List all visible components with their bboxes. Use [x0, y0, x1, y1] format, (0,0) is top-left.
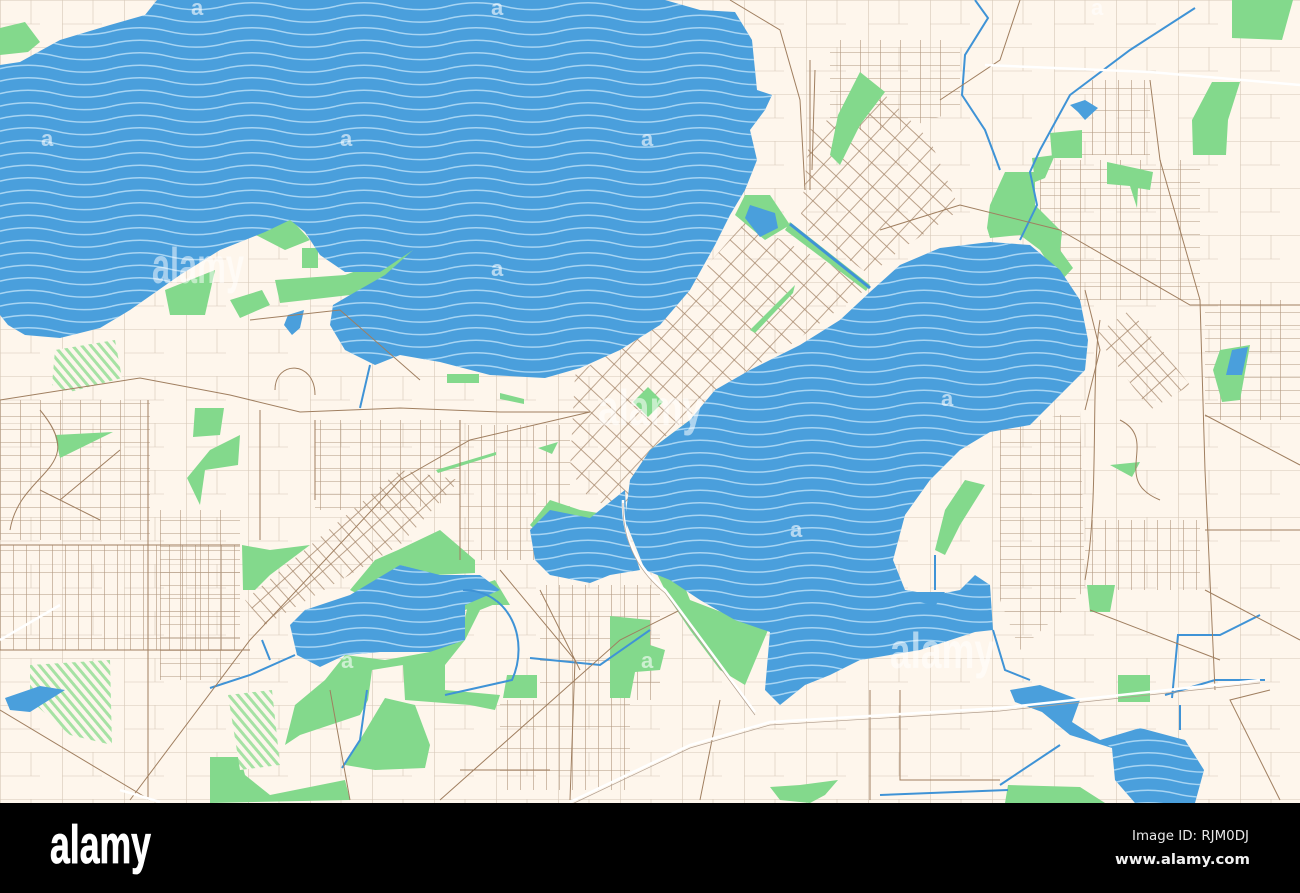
- park: isthmus north: [735, 195, 790, 240]
- park: north peninsula middle: [230, 290, 270, 318]
- footer logo: alamy: alamy: [50, 815, 151, 875]
- park: west irregular: [187, 435, 240, 505]
- park: shoreline strip: [632, 420, 695, 482]
- park: south shore: [655, 570, 768, 685]
- watermark: repeated letter marks: [41, 0, 1104, 673]
- park: east pond: [1213, 345, 1250, 402]
- watermark: repeated letter marks: a: [341, 648, 354, 673]
- lake: central: [625, 242, 1088, 705]
- park: arboretum: [285, 590, 505, 745]
- lake: bay: [530, 490, 640, 583]
- park: top right: [1232, 0, 1293, 40]
- streams and canals: [210, 0, 1265, 795]
- watermark: repeated letter marks: a: [340, 126, 353, 151]
- park: marsh north: [1032, 155, 1055, 182]
- park: south block: [610, 616, 665, 698]
- park: bay shore: [530, 500, 610, 530]
- watermark: repeated letter marks: a: [790, 517, 803, 542]
- watermark: repeated letter marks: a: [641, 126, 654, 151]
- park: north peninsula west: [165, 270, 215, 315]
- park: small patches: [436, 285, 1140, 477]
- watermark: downtown: alamy: [598, 380, 703, 436]
- park: small square: [1050, 130, 1082, 158]
- park: lake head marsh: [987, 172, 1073, 282]
- watermark: repeated letter marks: a: [41, 126, 54, 151]
- highway casing: [570, 503, 1260, 805]
- watermark: repeated letter marks: a: [491, 256, 504, 281]
- park: south east peninsula: [935, 480, 985, 555]
- golf courses: [30, 340, 280, 770]
- park: upper lake shore: [350, 530, 475, 595]
- park: square south: [1118, 675, 1150, 702]
- park: lake east shore: [465, 580, 510, 610]
- park: west square: [193, 408, 224, 437]
- park: bottom right: [1005, 785, 1105, 803]
- watermark: north peninsula: alamy: [152, 238, 244, 294]
- watermark: [41, 0, 1104, 679]
- park: north peninsula spit: [275, 250, 413, 303]
- footer website: www.alamy.com: [1115, 852, 1250, 868]
- watermark: south shore: alamy: [890, 623, 995, 679]
- park: bottom middle: [770, 780, 838, 803]
- park: rail corridor: [830, 72, 885, 165]
- park: east angular: [1107, 162, 1153, 208]
- park: bottom left: [210, 757, 350, 803]
- black footer bar: [0, 803, 1300, 893]
- park: small south: [503, 675, 537, 698]
- park: isthmus strip: [785, 222, 870, 291]
- park: north peninsula tip: [250, 218, 310, 250]
- park: small south east: [1087, 585, 1115, 612]
- park: arboretum south: [345, 698, 430, 770]
- park: north peninsula square: [302, 248, 318, 268]
- footer image id: Image ID: RJM0DJ: [1132, 829, 1249, 844]
- park: top left: [0, 22, 40, 55]
- lake: southeast: [1010, 685, 1204, 803]
- park: west wedge: [55, 432, 113, 458]
- ponds: [5, 100, 1248, 712]
- park: northeast block: [1192, 82, 1240, 155]
- lake: southwest: [290, 565, 500, 667]
- watermark: repeated letter marks: a: [941, 386, 954, 411]
- park: west: [242, 545, 310, 590]
- lake: north: [0, 0, 772, 378]
- park: downtown square: [633, 387, 663, 417]
- watermark: repeated letter marks: a: [641, 648, 654, 673]
